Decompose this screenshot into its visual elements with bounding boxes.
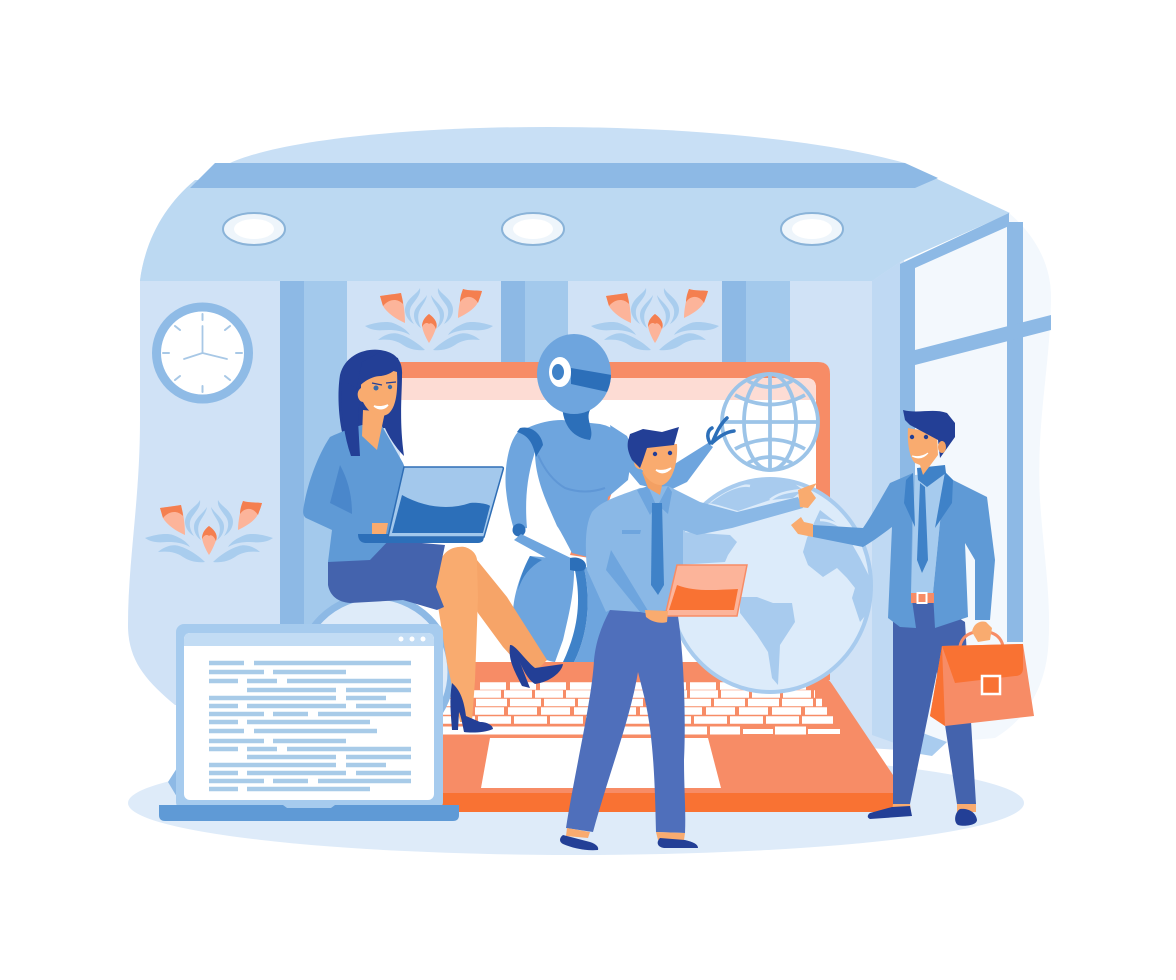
ceiling lights — [223, 213, 843, 245]
robot neck — [562, 402, 591, 440]
wall clock — [156, 307, 248, 399]
globe polar streaks — [710, 486, 845, 530]
woman near leg — [435, 547, 478, 722]
floor ellipse — [128, 751, 1024, 855]
centre man hand — [645, 610, 668, 623]
wall flower ornament 3 — [145, 500, 273, 562]
robot left arm — [506, 428, 538, 530]
woman laptop — [358, 534, 485, 543]
briefcase — [930, 621, 1034, 726]
small blue laptop with code — [159, 624, 459, 821]
right man belt — [911, 593, 934, 603]
room background blob — [128, 128, 1051, 750]
woman shoe right — [510, 645, 563, 688]
ceiling — [140, 127, 1010, 281]
keyboard — [442, 686, 840, 732]
wall columns — [280, 262, 900, 745]
robot right arm — [610, 425, 713, 491]
right man tie — [917, 483, 928, 573]
right man hair — [903, 410, 955, 458]
robot hand fingers — [708, 418, 734, 443]
woman hair back — [338, 350, 404, 456]
right man trousers — [893, 603, 976, 804]
right man face — [908, 428, 938, 475]
orange tablet in robot hand — [570, 492, 612, 558]
centre man neck — [642, 472, 664, 495]
woman hair front strand — [341, 378, 360, 456]
right man lapels — [904, 473, 915, 527]
africa — [803, 510, 869, 622]
centre man pointing hand — [798, 483, 817, 508]
trackpad — [481, 738, 721, 788]
woman face — [358, 370, 397, 416]
code lines — [209, 663, 411, 789]
wireframe globe icon — [722, 374, 818, 470]
illustration: office scene — [128, 127, 1051, 855]
woman skirt — [328, 540, 445, 610]
man in centre with laptop — [560, 427, 817, 850]
man on right with briefcase — [791, 410, 1034, 826]
centre man trousers — [566, 610, 685, 833]
woman fringe — [356, 352, 402, 390]
right man hand on handle — [972, 621, 992, 642]
wall flower ornament 1 — [365, 288, 493, 350]
centre man hair — [628, 427, 679, 468]
woman neck — [362, 410, 385, 450]
centre man shoes — [560, 835, 598, 850]
woman crossed leg — [455, 547, 547, 677]
centre man face — [634, 444, 677, 485]
centre man laptop — [665, 565, 747, 616]
north cap — [709, 481, 802, 511]
right man shirt — [911, 472, 945, 593]
large orange laptop — [400, 362, 893, 812]
robot lower body — [513, 556, 574, 662]
woman sweater — [303, 425, 405, 562]
south america — [740, 597, 795, 685]
woman shoe left — [450, 683, 493, 733]
stool under woman — [168, 596, 451, 797]
large earth globe — [669, 478, 880, 692]
window frame — [900, 213, 1051, 756]
centre man ankles — [566, 828, 685, 840]
woman with laptop — [303, 350, 563, 733]
right man jacket — [813, 473, 916, 628]
wall flower ornament 2 — [591, 288, 719, 350]
robot — [506, 334, 734, 662]
woman hand — [372, 523, 388, 534]
robot torso — [527, 420, 632, 560]
centre man collar — [637, 486, 672, 515]
centre man tie — [651, 503, 664, 595]
right man hand gesturing — [791, 517, 813, 537]
robot head — [537, 334, 611, 414]
right man ankles — [892, 804, 976, 812]
centre man shirt — [586, 486, 803, 612]
right man shoes — [868, 806, 912, 819]
